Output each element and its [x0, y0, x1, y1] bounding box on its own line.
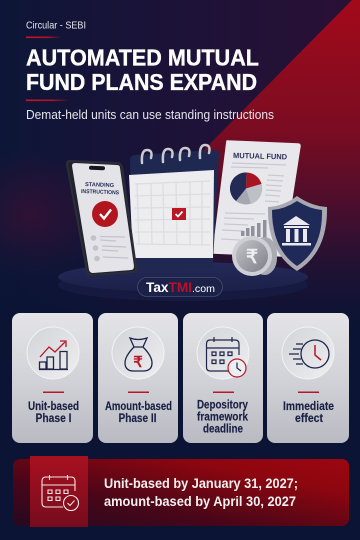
calendar [129, 145, 219, 269]
phone label: INSTRUCTIONS [81, 189, 119, 196]
banner text: Unit-based by January 31, 2027; [104, 476, 298, 491]
card: Depository framework deadline [183, 313, 263, 443]
logo badge [138, 278, 222, 296]
phone [67, 161, 136, 275]
shield [268, 196, 327, 271]
eyebrow: Circular - SEBI: Circular - SEBI [26, 20, 86, 32]
card: Unit-based Phase I [12, 313, 93, 443]
card: Immediate effect: effect [295, 413, 323, 425]
card: Amount-based Phase II: Phase II [118, 413, 156, 425]
card: Amount-based Phase II: ₹ [133, 354, 143, 371]
icon: growth chart [39, 341, 68, 370]
card: Depository framework deadline: deadline [203, 424, 243, 436]
card: Unit-based Phase I: Unit-based [28, 401, 79, 413]
card: Amount-based Phase II: Amount-based [105, 401, 172, 413]
accent rule top [26, 36, 62, 38]
platform [58, 262, 308, 301]
deadline banner [13, 456, 349, 527]
document: mutual fund: MUTUAL FUND [233, 151, 288, 161]
card: Amount-based Phase II [98, 313, 178, 443]
mini bars [241, 220, 266, 238]
banner text [104, 476, 298, 509]
icon: calendar clock [206, 337, 246, 377]
rupee coin [232, 236, 277, 276]
card: Depository framework deadline: framework [197, 412, 249, 424]
title: FUND PLANS EXPAND [26, 69, 257, 95]
check badge [92, 201, 118, 227]
card: Depository framework deadline: Depository [197, 400, 249, 412]
icon: calendar check [42, 475, 78, 510]
bank icon [282, 216, 311, 246]
logo badge: TaxTMI.com [146, 280, 215, 295]
phone label: STANDING [85, 182, 114, 189]
card: Unit-based Phase I: Phase I [36, 413, 72, 425]
title [26, 44, 259, 95]
phone label [81, 182, 119, 196]
card: Immediate effect [267, 313, 349, 443]
rupee coin: ₹ [246, 247, 258, 268]
banner text: amount-based by April 30, 2027 [104, 494, 296, 509]
title: AUTOMATED MUTUAL [26, 44, 259, 70]
accent rule bottom [26, 100, 70, 101]
calendar rings [142, 145, 210, 163]
hero illustration [58, 141, 327, 301]
subtitle: Demat-held units can use standing instructions [26, 107, 274, 122]
card: Immediate effect: Immediate [283, 401, 334, 413]
document: mutual fund [213, 141, 300, 256]
icon: fast clock [289, 340, 329, 368]
icon: money bag [125, 338, 152, 371]
pie chart [230, 172, 262, 204]
